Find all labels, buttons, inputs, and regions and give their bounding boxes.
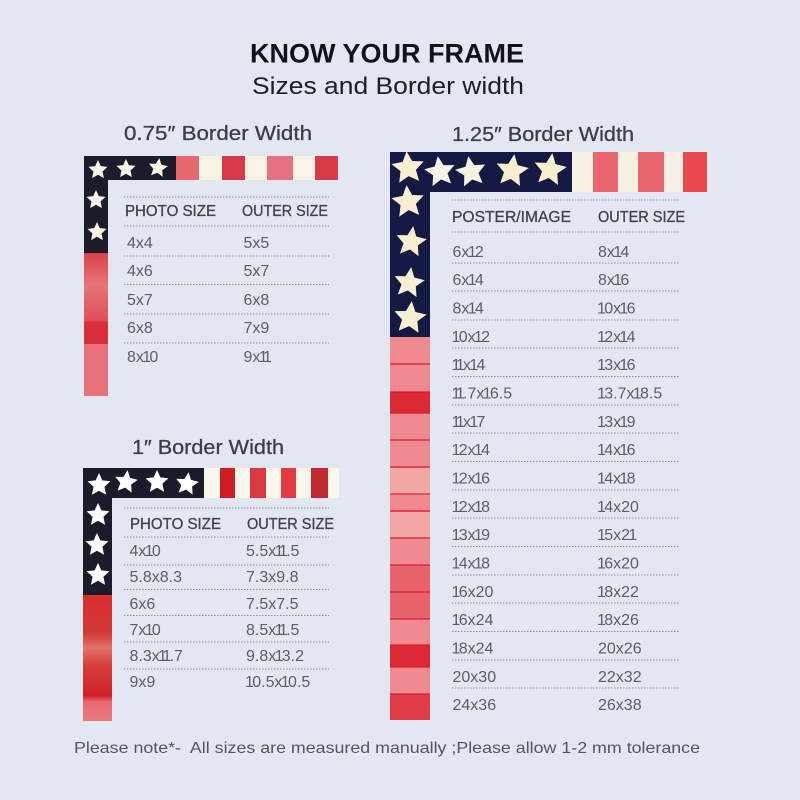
heading: 1.25 inch: 1.25″ Border Width xyxy=(452,124,634,146)
table: 1 inch sizes: 7.3x9.8 xyxy=(246,569,299,586)
frame corner: 1.25 inch xyxy=(390,150,707,720)
panel: 1 inch border xyxy=(83,437,339,721)
frame corner: 0.75 inch xyxy=(84,156,338,396)
table: 1.25 inch sizes: 18x26 xyxy=(597,612,639,629)
table: 1.25 inch sizes: 14x18 xyxy=(452,556,490,572)
table: 1.25 inch sizes: 13x19 xyxy=(597,414,636,431)
table: 0.75 inch sizes: 8x10 xyxy=(127,349,158,366)
table: 1.25 inch sizes: 6x12 xyxy=(452,244,484,261)
table: 1.25 inch sizes: 22x32 xyxy=(598,669,642,686)
table: 1.25 inch sizes: 12x18 xyxy=(452,499,490,516)
title: KNOW YOUR FRAME xyxy=(250,38,524,68)
table: 1 inch sizes: OUTER SIZE xyxy=(247,516,334,533)
table: 0.75 inch sizes: 6x8 xyxy=(127,320,153,337)
table: 1.25 inch sizes: 16x24 xyxy=(452,612,494,629)
table: 1 inch sizes: 8.3x11.7 xyxy=(130,648,183,665)
table: 1.25 inch sizes: 24x36 xyxy=(452,697,496,714)
table: 1 inch sizes: 9x9 xyxy=(130,674,155,691)
table: 0.75 inch sizes: 5x7 xyxy=(127,292,153,309)
table: 1 inch sizes: 8.5x11.5 xyxy=(246,622,300,639)
table: 1.25 inch sizes: 10x12 xyxy=(452,329,490,346)
table: 0.75 inch sizes: 4x4 xyxy=(127,235,153,252)
heading: 0.75 inch: 0.75″ Border Width xyxy=(124,123,312,145)
table: 0.75 inch sizes: 6x8 xyxy=(244,292,269,309)
table: 0.75 inch sizes: OUTER SIZE xyxy=(242,203,328,220)
table: 1.25 inch sizes: 14x16 xyxy=(597,442,636,459)
table: 1 inch sizes: 9.8x13.2 xyxy=(246,648,304,665)
table: 1.25 inch sizes: POSTER/IMAGE xyxy=(452,209,571,226)
footnote: Please note*- All sizes are measured manually ;Please allow 1-2 mm tolerance xyxy=(74,740,700,757)
table: 1.25 inch sizes: 13.7x18.5 xyxy=(597,386,662,402)
frame corner: 1 inch xyxy=(83,468,339,721)
table: 1.25 inch sizes: 13x19 xyxy=(452,527,490,544)
table: 1.25 inch sizes: 15x21 xyxy=(597,527,637,544)
table: 1.25 inch sizes: 16x20 xyxy=(452,584,494,601)
table: 1.25 inch sizes: 11x14 xyxy=(452,357,486,374)
table: 1.25 inch sizes: 8x14 xyxy=(452,300,484,318)
table: 1.25 inch sizes: 12x16 xyxy=(452,470,490,488)
table: 1 inch sizes: 4x10 xyxy=(130,543,161,560)
table: 1.25 inch sizes: 12x14 xyxy=(597,329,636,346)
table: 0.75 inch sizes: 4x6 xyxy=(127,263,153,280)
table: 1 inch sizes: 10.5x10.5 xyxy=(245,674,310,691)
table: 1.25 inch sizes: 11x17 xyxy=(452,414,486,431)
table: 1 inch sizes: 6x6 xyxy=(130,596,155,613)
table: 1.25 inch sizes: 8x16 xyxy=(598,272,629,289)
panel: 0.75 inch border xyxy=(84,123,338,396)
table: 1.25 inch sizes: 20x30 xyxy=(452,669,496,686)
table: 1.25 inch sizes: 26x38 xyxy=(598,697,642,714)
table: 0.75 inch sizes: 9x11 xyxy=(244,349,272,366)
table: 1 inch sizes: 7x10 xyxy=(130,622,161,639)
table: 1.25 inch sizes xyxy=(452,200,685,714)
table: 1.25 inch sizes: 20x26 xyxy=(598,640,642,658)
table: 1 inch sizes: PHOTO SIZE xyxy=(130,516,221,533)
table: 1.25 inch sizes: 16x20 xyxy=(597,556,639,572)
subtitle: Sizes and Border width xyxy=(252,73,524,100)
table: 0.75 inch sizes: 7x9 xyxy=(244,320,269,337)
table: 0.75 inch sizes: 5x5 xyxy=(244,235,269,252)
table: 1.25 inch sizes: 6x14 xyxy=(452,272,484,289)
table: 0.75 inch sizes: PHOTO SIZE xyxy=(125,203,216,220)
table: 1.25 inch sizes: 14x20 xyxy=(597,499,639,516)
table: 1 inch sizes: 7.5x7.5 xyxy=(246,596,299,613)
table: 1.25 inch sizes: 8x14 xyxy=(598,244,629,261)
table: 1 inch sizes xyxy=(124,508,334,691)
heading: 1 inch: 1″ Border Width xyxy=(132,437,284,459)
table: 1.25 inch sizes: 14x18 xyxy=(597,470,636,488)
table: 1.25 inch sizes: 18x24 xyxy=(452,640,494,658)
panel: 1.25 inch border xyxy=(390,124,707,720)
table: 1.25 inch sizes: 11.7x16.5 xyxy=(452,386,512,402)
table: 1 inch sizes: 5.5x11.5 xyxy=(246,543,300,560)
table: 1.25 inch sizes: 18x22 xyxy=(597,584,639,601)
table: 0.75 inch sizes xyxy=(124,197,329,366)
table: 1 inch sizes: 5.8x8.3 xyxy=(130,569,182,586)
table: 1.25 inch sizes: 12x14 xyxy=(452,442,490,459)
table: 1.25 inch sizes: 13x16 xyxy=(597,357,636,374)
table: 1.25 inch sizes: 10x16 xyxy=(597,300,636,318)
table: 0.75 inch sizes: 5x7 xyxy=(244,263,269,280)
table: 1.25 inch sizes: OUTER SIZE xyxy=(598,209,685,226)
